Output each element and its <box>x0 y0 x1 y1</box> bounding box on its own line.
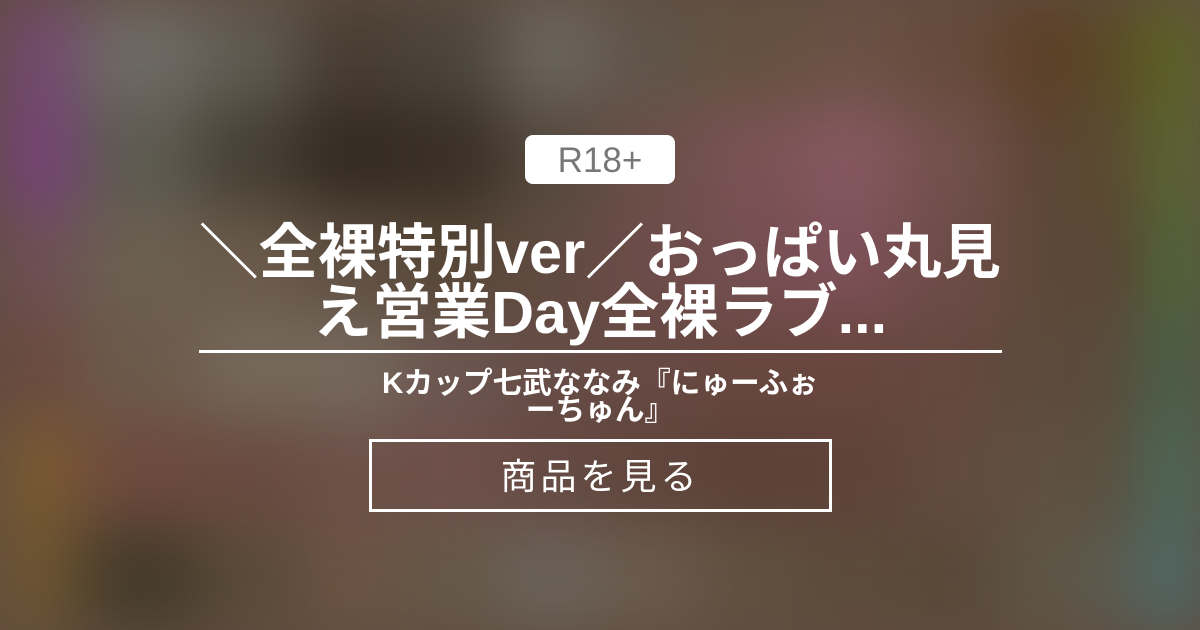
badge: R18+: R18+ <box>558 141 642 180</box>
title: ＼全裸特別ver／おっぱい丸見 <box>199 219 1001 286</box>
button: view product: 商品を見る <box>500 456 700 497</box>
badge: R18+ <box>525 135 675 184</box>
shop name: ーちゅん』 <box>526 394 674 427</box>
shop name <box>382 367 818 427</box>
button: view product <box>369 439 832 512</box>
shop name: Kカップ七武ななみ『にゅーふぉ <box>382 367 818 400</box>
divider line <box>199 350 1002 353</box>
title <box>199 219 1001 346</box>
title: え営業Day全裸ラブ... <box>313 279 887 346</box>
